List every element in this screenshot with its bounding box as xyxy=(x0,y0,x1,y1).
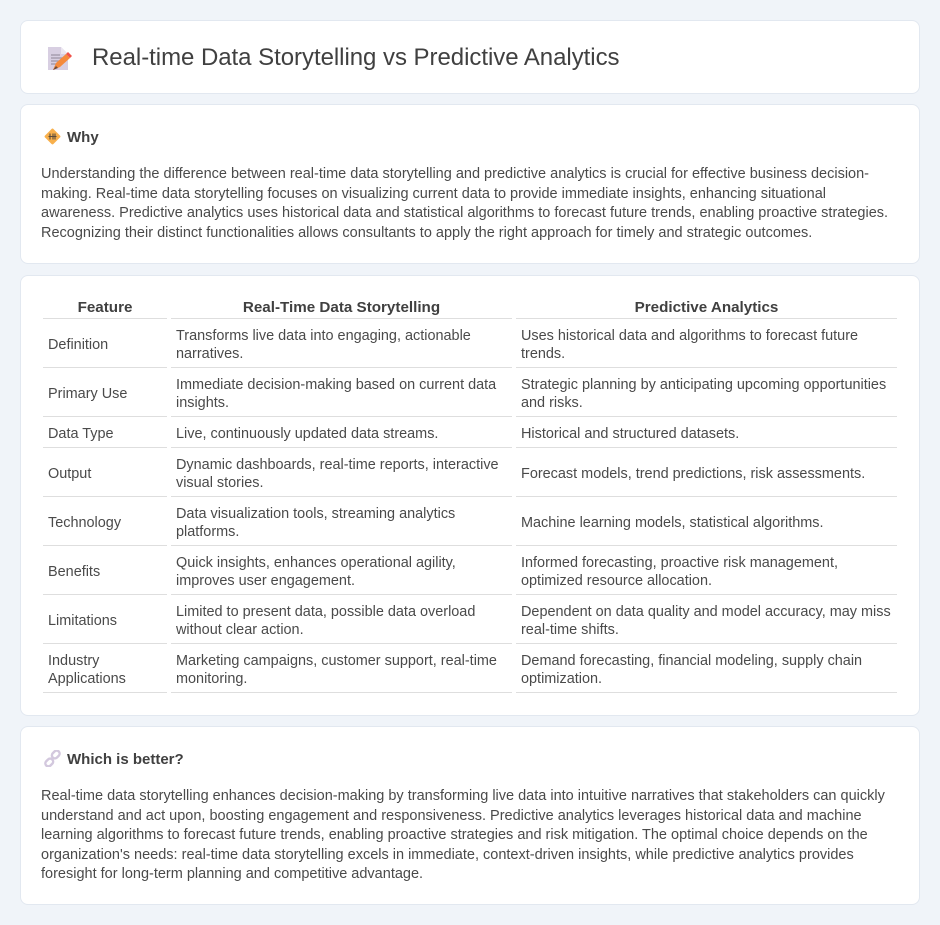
comparison table: Output xyxy=(48,466,91,482)
heading: why: Why xyxy=(67,129,99,146)
comparison table: Limitations xyxy=(48,612,117,628)
panel: comparison table card xyxy=(20,275,920,716)
comparison table xyxy=(43,298,897,693)
comparison table: narratives. xyxy=(176,346,243,362)
text block: which is better: organization's needs: real-time data storytelling excels in immediate, context-driven insights, while predictive analytics provides xyxy=(41,847,854,863)
comparison table: Historical and structured datasets. xyxy=(521,426,739,442)
comparison table: Forecast models, trend predictions, risk assessments. xyxy=(521,466,865,482)
comparison table: Demand forecasting, financial modeling, supply chain xyxy=(521,652,862,668)
comparison table: Data visualization tools, streaming analytics xyxy=(176,506,455,522)
comparison table: Feature xyxy=(78,298,132,316)
comparison table: Technology xyxy=(48,514,121,530)
comparison table: optimized resource allocation. xyxy=(521,572,712,588)
comparison table: Benefits xyxy=(48,564,100,580)
text block: why: awareness. Predictive analytics uses historical data and statistical algorithms to forecast future trends, enabling proactive strategies. xyxy=(41,205,888,221)
comparison table: Industry xyxy=(48,652,99,668)
comparison table: Real-Time Data Storytelling xyxy=(243,298,440,316)
comparison table: Dependent on data quality and model accuracy, may miss xyxy=(521,604,891,620)
comparison table: Primary Use xyxy=(48,386,127,402)
text block: why: making. Real-time data storytelling focuses on visualizing current data to provide immediate insights, enhancing situational xyxy=(41,186,826,202)
comparison table: Strategic planning by anticipating upcoming opportunities xyxy=(521,376,886,392)
comparison table: Predictive Analytics xyxy=(635,298,778,316)
panel: which is better card xyxy=(20,726,920,905)
text block: which is better: Real-time data storytelling enhances decision-making by transforming live data into intuitive narratives that stakeholders can quickly xyxy=(41,788,885,804)
comparison table: without clear action. xyxy=(176,622,304,638)
text block: why: Recognizing their distinct functionalities allows consultants to apply the right approach for timely and strategic outcomes. xyxy=(41,225,812,241)
panel: title card xyxy=(20,20,920,94)
comparison table: trends. xyxy=(521,346,565,362)
comparison table: Informed forecasting, proactive risk management, xyxy=(521,554,838,570)
icon: document with pencil xyxy=(48,47,72,70)
comparison table: Data Type xyxy=(48,426,114,442)
comparison table: platforms. xyxy=(176,524,239,540)
comparison table: optimization. xyxy=(521,670,602,686)
comparison table: real-time shifts. xyxy=(521,622,619,638)
comparison table: Immediate decision-making based on current data xyxy=(176,376,496,392)
comparison table: Transforms live data into engaging, actionable xyxy=(176,328,471,344)
text block: why xyxy=(41,166,888,241)
text block: which is better: foresight for long-term planning and competitive advantage. xyxy=(41,866,423,882)
comparison table: Marketing campaigns, customer support, real-time xyxy=(176,652,497,668)
comparison table: improves user engagement. xyxy=(176,572,355,588)
comparison table: Definition xyxy=(48,336,108,352)
heading: which is better: Which is better? xyxy=(67,751,184,768)
text block: which is better: learning algorithms to forecast future trends, enabling proactive strategies and risk mitigation. The optimal choice depends on the xyxy=(41,827,868,843)
comparison table: visual stories. xyxy=(176,474,263,490)
comparison table: Live, continuously updated data streams. xyxy=(176,426,438,442)
title: Real-time Data Storytelling vs Predictive Analytics xyxy=(92,44,620,71)
icon: chain link xyxy=(44,750,61,767)
comparison table: Applications xyxy=(48,670,126,686)
text block: which is better xyxy=(41,788,885,882)
comparison table: Dynamic dashboards, real-time reports, interactive xyxy=(176,456,499,472)
comparison table: Limited to present data, possible data overload xyxy=(176,604,475,620)
text block: which is better: understand and act upon, boosting engagement and responsiveness. Predictive analytics leverages historical data and machine xyxy=(41,808,862,824)
comparison table: Machine learning models, statistical algorithms. xyxy=(521,514,824,530)
icon: warning diamond xyxy=(44,128,60,144)
comparison table: Quick insights, enhances operational agility, xyxy=(176,554,456,570)
text block: why: Understanding the difference between real-time data storytelling and predictive analytics is crucial for effective business decision- xyxy=(41,166,869,182)
comparison table: insights. xyxy=(176,394,229,410)
comparison table: and risks. xyxy=(521,394,583,410)
panel: why card xyxy=(20,104,920,264)
comparison table: Uses historical data and algorithms to forecast future xyxy=(521,328,858,344)
comparison table: monitoring. xyxy=(176,670,247,686)
